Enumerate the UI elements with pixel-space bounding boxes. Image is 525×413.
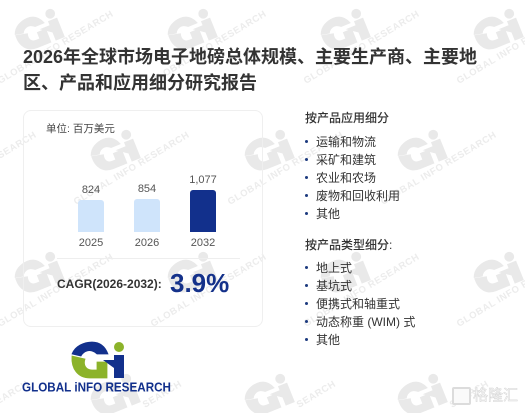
background watermark pattern: GLOBAL INFO RESEARCH (302, 9, 422, 87)
background watermark pattern: GLOBAL INFO RESEARCH (226, 130, 346, 208)
bar: 2025: 824 (82, 184, 100, 196)
bar: 2026: 854 (138, 183, 156, 195)
watermark: Gelonghui: 格隆汇 (473, 387, 518, 404)
watermark: Gelonghui (452, 387, 518, 405)
background watermark pattern: SEARCH (141, 379, 184, 411)
list: types: 动态称重 (WIM) 式 (316, 315, 415, 329)
title: 2026年全球市场电子地磅总体规模、主要生产商、主要地区、产品和应用细分研究报告 (23, 47, 477, 93)
unit label: 单位: 百万美元 (46, 123, 115, 135)
heading: by application: 按产品应用细分 (305, 111, 389, 125)
bar: 2032 (189, 174, 217, 249)
panel: market size chart (23, 110, 263, 327)
list: applications: 废物和回收利用 (316, 189, 400, 203)
bar: 2026: 2026 (135, 237, 159, 249)
background watermark pattern: GLOBAL INFO RESEARCH (149, 252, 269, 330)
CAGR value: 3.9% (170, 268, 229, 298)
list: types: 便携式和轴重式 (316, 297, 400, 311)
logo: Global Info Research (22, 342, 171, 394)
bar: 2026 (134, 183, 160, 249)
background watermark pattern: SEARCH (448, 379, 491, 411)
background watermark pattern: GLOBAL INFO RESEARCH (379, 130, 499, 208)
list: applications: 采矿和建筑 (316, 153, 376, 167)
bar: 2032: 1,077 (189, 174, 217, 186)
bar: 2025: 2025 (79, 237, 103, 249)
list: types: 其他 (316, 333, 340, 347)
list: types: 地上式 (316, 261, 352, 275)
list: applications: 运输和物流 (316, 135, 376, 149)
background watermark pattern: GLOBAL INFO RESEARCH (302, 252, 422, 330)
bar: 2032: 2032 (191, 237, 215, 249)
list: applications (305, 135, 400, 221)
background watermark pattern: GLOBAL INFO RESEARCH (149, 9, 269, 87)
background watermark pattern: SEARCH (295, 379, 338, 411)
bar: 2025 (78, 184, 104, 249)
divider (57, 258, 240, 259)
list: types (305, 261, 415, 347)
list: applications: 其他 (316, 207, 340, 221)
list: applications: 农业和农场 (316, 171, 376, 185)
list: types: 基坑式 (316, 279, 352, 293)
logo: Global Info Research: GLOBAL iNFO RESEARCH (22, 380, 171, 394)
heading: by type: 按产品类型细分: (305, 238, 392, 252)
background watermark pattern: GLOBAL INFO RESEARCH (72, 130, 192, 208)
CAGR label: CAGR(2026-2032): (57, 277, 162, 291)
